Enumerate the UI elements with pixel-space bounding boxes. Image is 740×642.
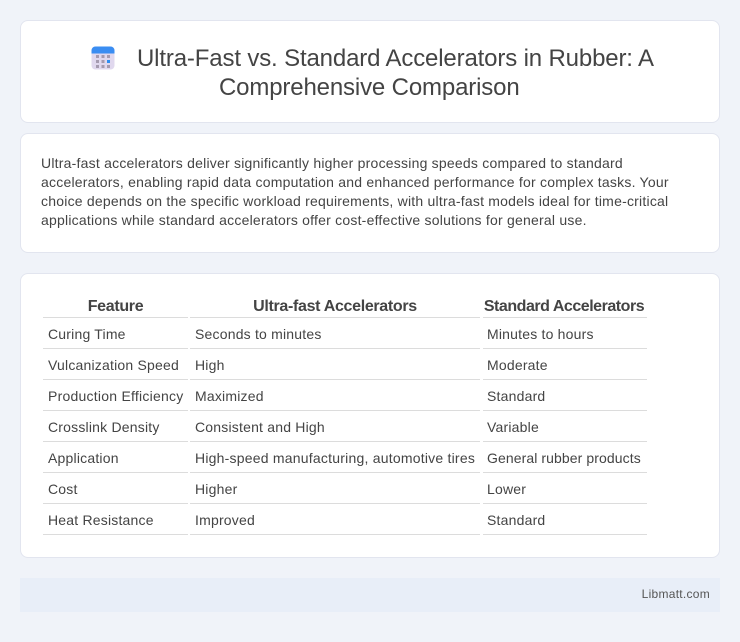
panel: comparison table card: [20, 273, 720, 558]
row: Heat Resistance: Standard: [487, 512, 545, 528]
row: Cost: Cost: [48, 481, 78, 497]
title: Comprehensive Comparison: [219, 74, 520, 101]
row: Vulcanization Speed: Moderate: [487, 357, 548, 373]
row: Curing Time: [48, 326, 594, 342]
panel: title card: [20, 20, 720, 123]
row: Vulcanization Speed: Vulcanization Speed: [48, 357, 179, 373]
row: Heat Resistance: [48, 512, 545, 528]
row: Vulcanization Speed: High: [195, 357, 225, 373]
row: Cost: [48, 481, 526, 497]
row: Heat Resistance: Heat Resistance: [48, 512, 154, 528]
row: Cost: Higher: [195, 481, 237, 497]
row: Crosslink Density: Variable: [487, 419, 539, 435]
row: Production Efficiency: Production Efficiency: [48, 388, 184, 404]
row: Application: Application: [48, 450, 119, 466]
footer bar: [20, 578, 720, 612]
footer bar: Libmatt.com: [642, 587, 710, 601]
row: Application: General rubber products: [487, 450, 641, 466]
row: Cost: Lower: [487, 481, 526, 497]
comparison table: [43, 298, 647, 535]
intro text: applications while standard accelerators offer cost-effective solutions for general use.: [41, 212, 587, 228]
row: Production Efficiency: Maximized: [195, 388, 264, 404]
panel: intro card: [20, 133, 720, 253]
header: Feature: Feature: [88, 298, 143, 315]
row: Production Efficiency: [48, 388, 545, 404]
title: Ultra-Fast vs. Standard Accelerators in Rubber: A: [137, 45, 654, 72]
intro text: [41, 155, 669, 228]
row: Curing Time: Seconds to minutes: [195, 326, 322, 342]
row: Crosslink Density: [48, 419, 539, 435]
row: Heat Resistance: Improved: [195, 512, 255, 528]
intro text: Ultra-fast accelerators deliver significantly higher processing speeds compared to standard: [41, 155, 623, 171]
header: Standard Accelerators: Standard Accelerators: [484, 298, 644, 315]
row: Application: [48, 450, 641, 466]
header: Ultra-fast Accelerators: Ultra-fast Accelerators: [253, 298, 417, 315]
row: Application: High-speed manufacturing, automotive tires: [195, 450, 475, 466]
row: Curing Time: Curing Time: [48, 326, 126, 342]
intro text: accelerators, enabling rapid data computation and enhanced performance for complex tasks. Your: [41, 174, 669, 190]
title: [137, 45, 654, 101]
row: Crosslink Density: Crosslink Density: [48, 419, 160, 435]
row: Crosslink Density: Consistent and High: [195, 419, 325, 435]
row: Curing Time: Minutes to hours: [487, 326, 594, 342]
row: Vulcanization Speed: [48, 357, 548, 373]
intro text: choice depends on the specific workload requirements, with ultra-fast models ideal for time-critical: [41, 193, 668, 209]
icon: calendar: [92, 46, 114, 70]
row: Production Efficiency: Standard: [487, 388, 545, 404]
